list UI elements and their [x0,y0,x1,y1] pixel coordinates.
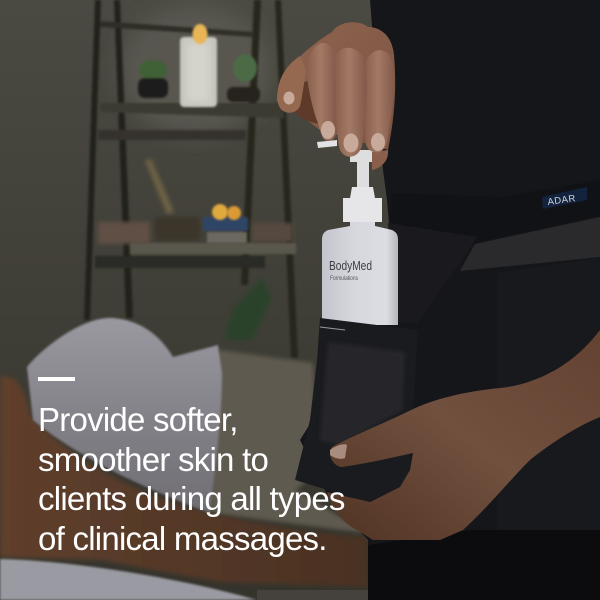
fingernails [284,92,385,152]
ADAR label tag: ADAR [547,193,577,208]
ADAR label tag [542,187,587,209]
bottle spout [317,140,337,148]
index finger [307,43,337,141]
therapist's uniform [300,0,600,600]
bottle brand text: BodyMed [329,258,372,273]
candle [180,24,217,107]
caption text: smoother skin to [38,441,268,478]
upper hand on pump [277,22,395,170]
small floor plant [225,278,272,340]
back of hand [282,22,395,150]
shelving unit [84,0,298,358]
lower arm and hand [327,330,600,540]
decorative caption rule [38,377,75,381]
caption text [38,401,345,557]
client's gray blanket [210,350,367,533]
lower shelf decor and lights [98,159,293,244]
belt strap [460,217,600,271]
thumb [277,56,306,113]
holster pouch [295,318,418,502]
client's body [0,377,368,587]
bottle body [322,222,398,325]
palm shadow [294,80,320,124]
lotion bottle [317,140,398,325]
towel on client's head [27,318,222,513]
caption text: clients during all types [38,480,345,517]
sheet under client [0,559,370,600]
holster flap [388,223,477,323]
bottle cap [343,187,382,222]
bottle pump stem [350,150,376,190]
middle finger [335,48,367,157]
caption text: Provide softer, [38,401,238,438]
potted plants on top shelf [138,54,260,102]
lotion bottle: Formulations [330,275,359,282]
little finger [372,150,388,170]
ring finger [365,50,394,152]
caption text: of clinical massages. [38,520,327,557]
